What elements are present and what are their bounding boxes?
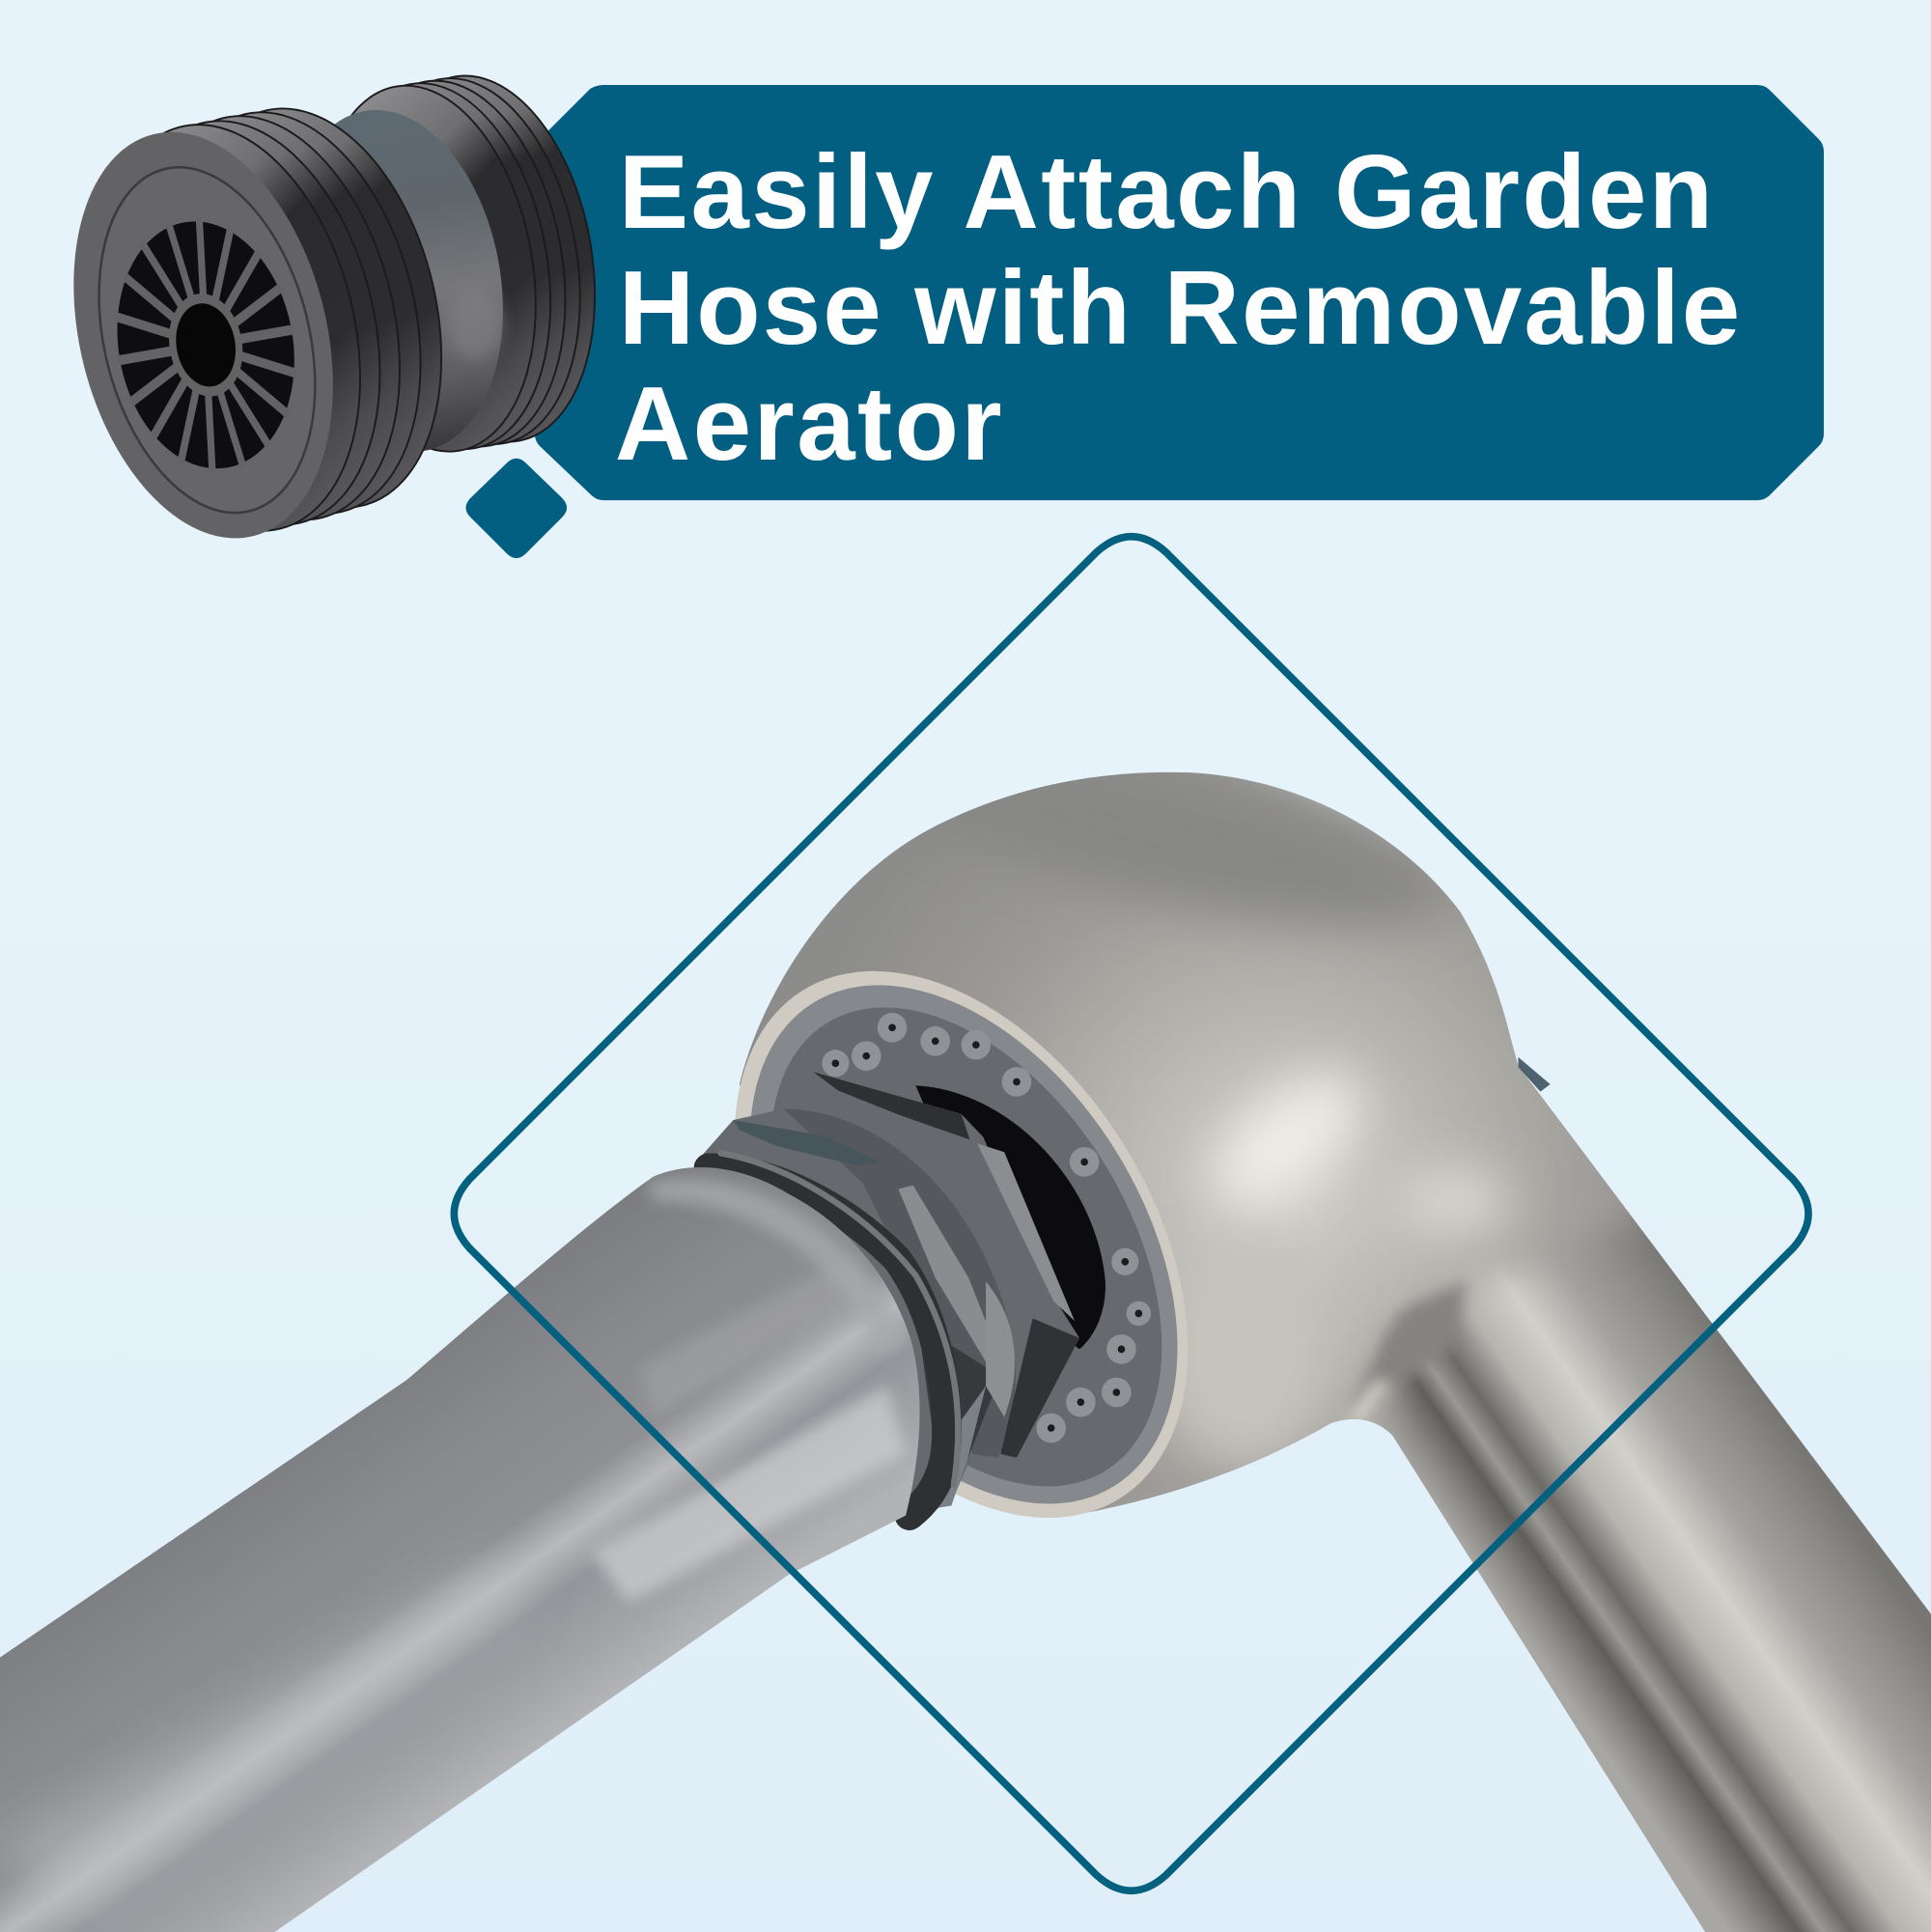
spray face ring bbox=[640, 889, 1282, 1600]
title text: Easily Attach Garden bbox=[619, 133, 1713, 250]
faucet stem bbox=[1294, 986, 1931, 1932]
hex nut connector bbox=[696, 1072, 1079, 1514]
diamond outline frame bbox=[454, 537, 1808, 1890]
title panel bbox=[535, 85, 1824, 500]
title text: Hose with Removable bbox=[619, 249, 1740, 366]
garden hose bbox=[0, 1167, 920, 1932]
small diamond accent bbox=[465, 459, 567, 558]
nut seat ring bbox=[709, 1168, 946, 1516]
faucet head bbox=[740, 772, 1641, 1513]
spray nozzles bbox=[822, 1013, 1151, 1442]
aerator rear threads bbox=[293, 59, 622, 469]
title text bbox=[615, 133, 1740, 482]
title text: Aerator bbox=[615, 365, 1002, 482]
photo: removable aerator bbox=[34, 59, 622, 566]
photo: faucet spray head and garden hose bbox=[0, 718, 1931, 1932]
aerator spokes bbox=[96, 205, 316, 485]
faucet body bbox=[690, 718, 1931, 1932]
aerator neck bbox=[260, 93, 529, 469]
aerator face bbox=[34, 104, 373, 566]
head notch bbox=[1518, 1057, 1551, 1092]
aerator front threads bbox=[61, 81, 481, 558]
elbow crease bbox=[1346, 1281, 1467, 1417]
